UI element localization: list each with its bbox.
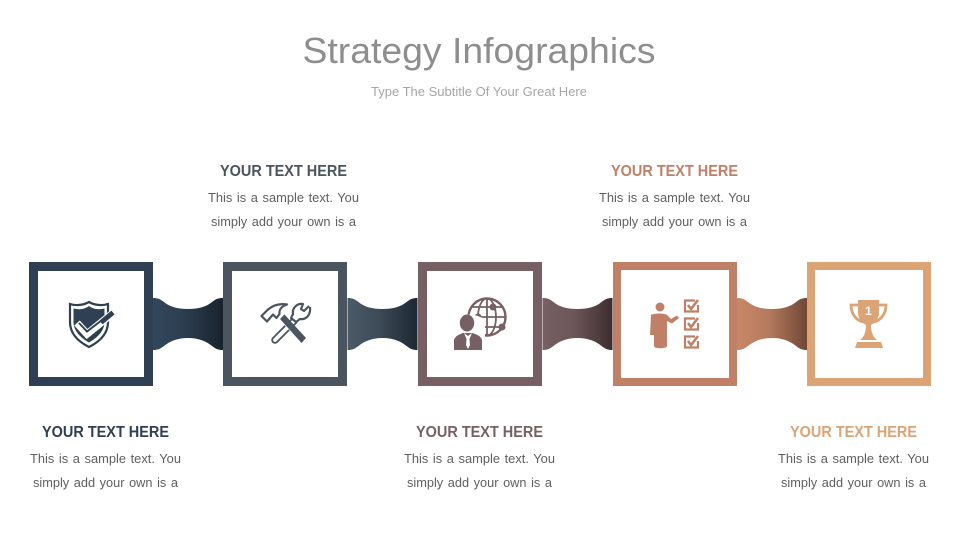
text block 5 (bottom): YOUR TEXT HERE	[790, 424, 917, 441]
step 5 square	[811, 266, 927, 382]
text block 4 (top)	[599, 163, 750, 229]
text block 4 (top): simply add your own is a	[602, 215, 747, 229]
text block 2 (top): This is a sample text. You	[208, 191, 359, 205]
icon: presenter with checklist	[650, 300, 698, 348]
text block 3 (bottom): YOUR TEXT HERE	[416, 424, 543, 441]
title: Strategy Infographics	[302, 30, 656, 71]
connector 1	[153, 298, 223, 350]
subtitle: Type The Subtitle Of Your Great Here	[371, 84, 587, 99]
icon: trophy: 1	[865, 304, 872, 318]
text block 1 (bottom)	[30, 424, 181, 490]
text block 5 (bottom): This is a sample text. You	[778, 452, 929, 466]
step 3 square	[422, 266, 538, 382]
connector 4	[737, 298, 807, 350]
connector 3	[542, 298, 612, 350]
text block 5 (bottom): simply add your own is a	[781, 476, 926, 490]
step 1 square	[34, 266, 148, 382]
icon: hammer and wrench	[262, 304, 310, 344]
icon: shield with check	[70, 302, 113, 347]
text block 3 (bottom): This is a sample text. You	[404, 452, 555, 466]
text block 3 (bottom): simply add your own is a	[407, 476, 552, 490]
text block 1 (bottom): YOUR TEXT HERE	[42, 424, 169, 441]
text block 2 (top): simply add your own is a	[211, 215, 356, 229]
step 4 square	[617, 266, 733, 382]
text block 2 (top): YOUR TEXT HERE	[220, 163, 347, 180]
text block 5 (bottom)	[778, 424, 929, 490]
text block 4 (top): This is a sample text. You	[599, 191, 750, 205]
connector 2	[348, 298, 418, 350]
icon: trophy	[851, 300, 886, 348]
text block 2 (top)	[208, 163, 359, 229]
text block 4 (top): YOUR TEXT HERE	[611, 163, 738, 180]
text block 1 (bottom): simply add your own is a	[33, 476, 178, 490]
step 2 square	[228, 266, 342, 382]
icon: person with globe	[451, 298, 506, 352]
text block 1 (bottom): This is a sample text. You	[30, 452, 181, 466]
text block 3 (bottom)	[404, 424, 555, 490]
